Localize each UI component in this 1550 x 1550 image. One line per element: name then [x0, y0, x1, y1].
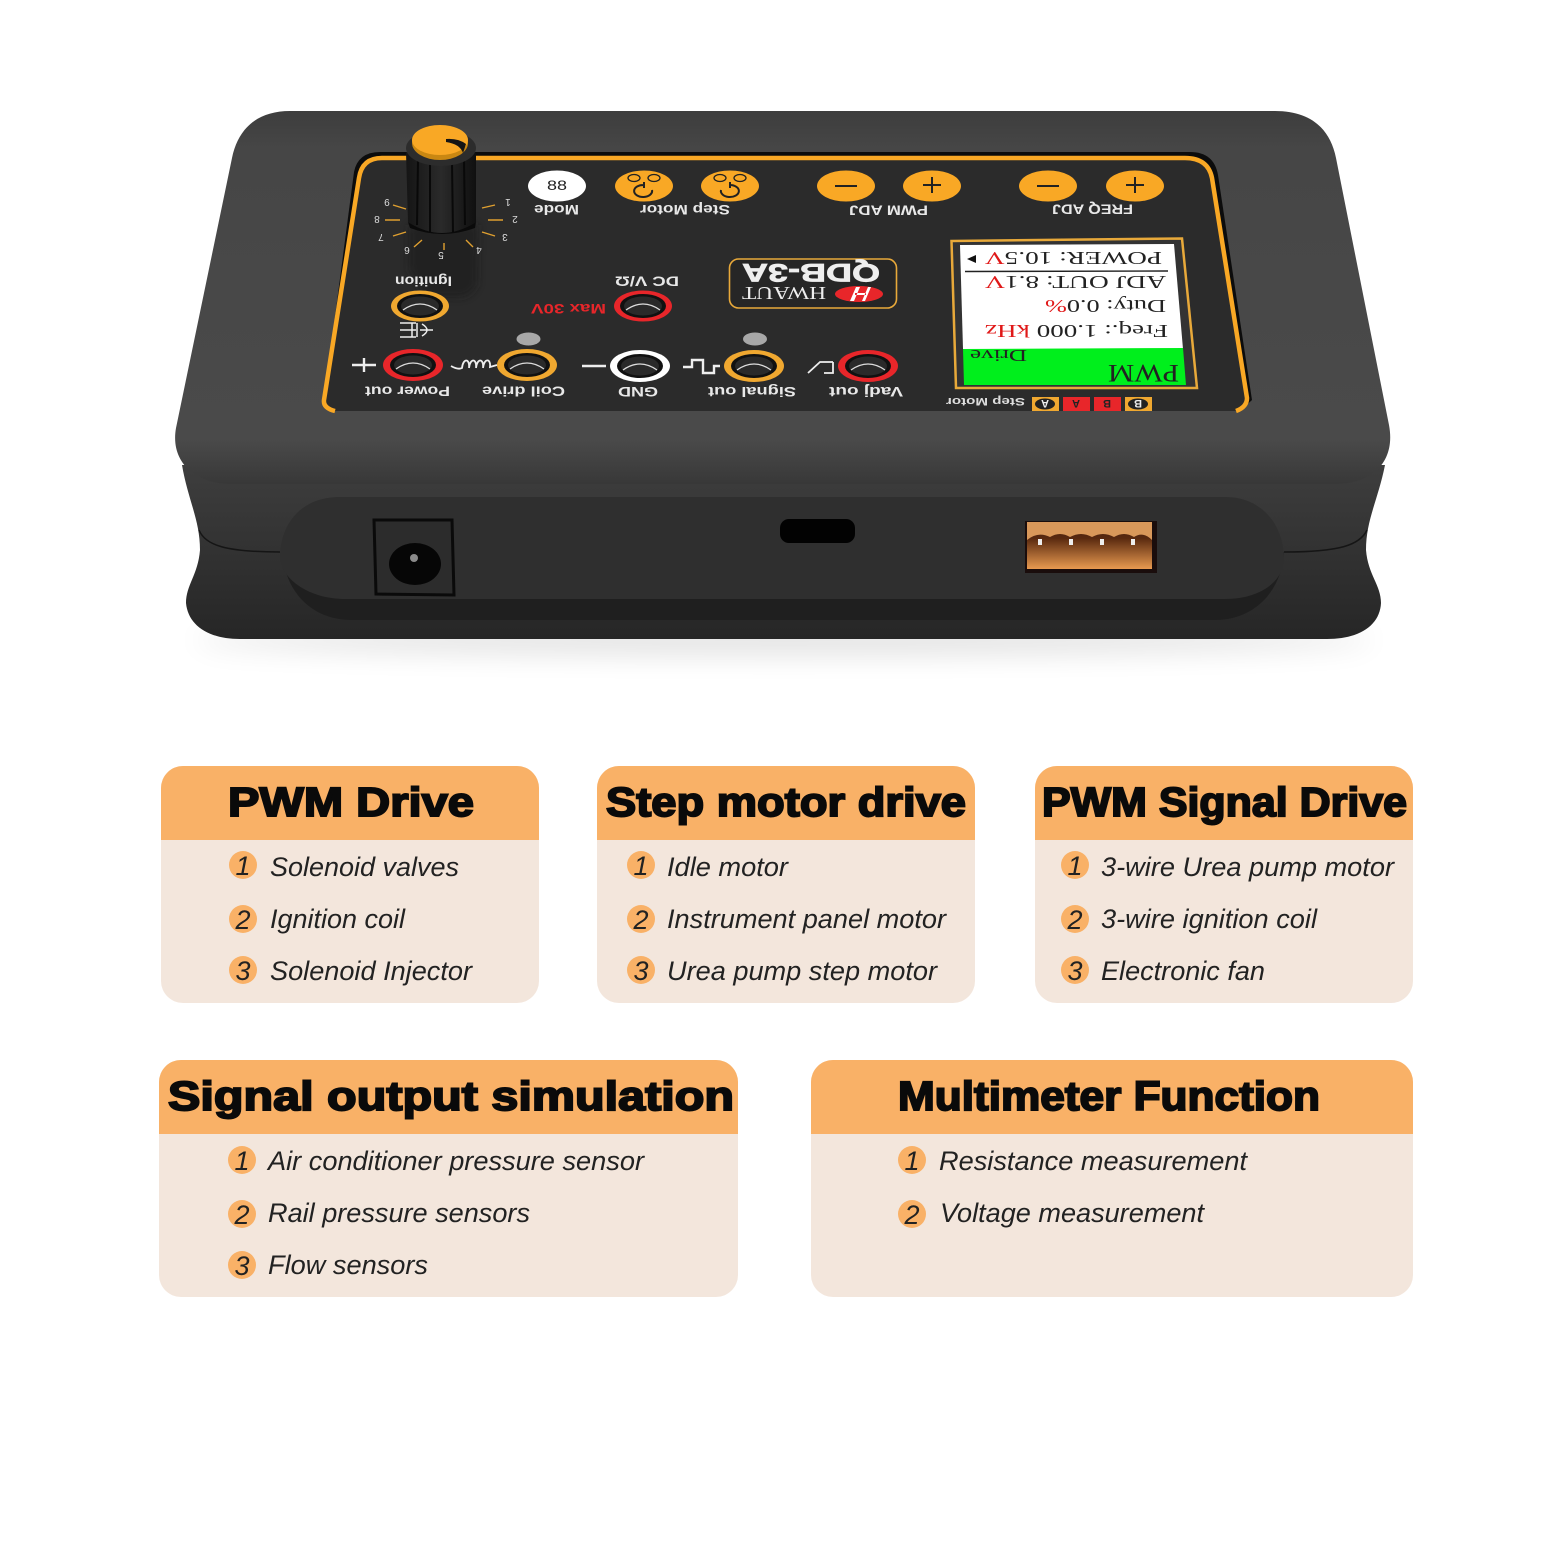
step motor pin legend: A	[1072, 397, 1080, 409]
dial tick marks	[385, 205, 503, 250]
button: mode	[528, 170, 586, 202]
step motor pin legend: Step Motor	[945, 395, 1025, 407]
jack: Vadj out	[838, 350, 898, 382]
dial numbers: 7	[378, 231, 384, 242]
panel: PWM Signal Drive	[1035, 766, 1413, 1003]
icon: DC power jack	[374, 520, 454, 595]
button: PWM plus	[903, 170, 961, 202]
panel fill	[324, 158, 1247, 411]
panel: Signal output simulation: Rail pressure sensors	[268, 1198, 530, 1228]
screen: PWM display: ADJ OUT: 8.1V	[985, 272, 1166, 292]
jack: ignition	[391, 290, 449, 322]
screen: PWM display: PWM	[1108, 359, 1179, 386]
jack labels: GND	[618, 384, 658, 400]
jack labels: Signal out	[708, 384, 796, 400]
button labels: PWM ADJ	[849, 202, 928, 218]
dial numbers: 3	[502, 231, 508, 242]
panel: Signal output simulation: 2	[233, 1200, 250, 1230]
icon: rear slot	[780, 519, 855, 543]
jack labels: Coil drive	[482, 384, 565, 400]
panel: Signal output simulation: Flow sensors	[268, 1250, 428, 1280]
step motor pin legend	[945, 395, 1152, 411]
panel: Multimeter Function: 1	[904, 1146, 920, 1176]
step motor pin legend: A	[1041, 397, 1049, 409]
product: QDB-3A device	[175, 111, 1390, 654]
step motor pin legend: B	[1103, 397, 1111, 409]
seam line	[199, 530, 1367, 552]
dial numbers: 2	[512, 213, 518, 224]
dial numbers	[374, 196, 518, 260]
panel: PWM Drive: 3	[235, 956, 251, 986]
panel: PWM Signal Drive: 3-wire ignition coil	[1101, 904, 1318, 934]
panel: PWM Drive: 2	[234, 905, 251, 935]
jack: power out	[383, 349, 443, 381]
device ground shadow	[194, 626, 1374, 654]
button labels	[534, 202, 1133, 218]
screen: PWM display: POWER: 10.5V	[985, 248, 1162, 268]
device top surface	[175, 111, 1390, 484]
panel: PWM Drive: PWM Drive	[228, 779, 474, 825]
icon: four-pin connector	[1025, 521, 1157, 573]
dial numbers: 5	[438, 249, 444, 260]
panel: PWM Drive: Solenoid valves	[270, 852, 459, 882]
screen: PWM display	[952, 238, 1197, 388]
button labels: Mode	[534, 202, 579, 218]
button: FREQ minus	[1019, 170, 1077, 202]
logo: QDB-3A HWAUT: HWAUT	[742, 283, 826, 303]
button: step motor forward	[701, 170, 759, 202]
panel: PWM Signal Drive: 3-wire Urea pump motor	[1101, 852, 1395, 882]
button: step motor reverse	[615, 170, 673, 202]
panel: Multimeter Function: Resistance measurement	[939, 1146, 1249, 1176]
panel: PWM Drive: 1	[235, 851, 251, 881]
button: PWM minus	[817, 170, 875, 202]
jack labels: Power out	[365, 384, 450, 400]
jack labels: Vadj out	[829, 384, 903, 400]
jack: DC volts/ohms	[614, 290, 672, 322]
jack: signal out	[724, 350, 784, 382]
panel: PWM Signal Drive: PWM Signal Drive	[1042, 779, 1407, 825]
logo: QDB-3A HWAUT: QDB-3A	[742, 258, 880, 286]
panel: Signal output simulation: 3	[234, 1251, 250, 1281]
jack labels: Max 30V	[530, 301, 606, 317]
panel: PWM Drive: Ignition coil	[270, 904, 406, 934]
jack labels: Ignition	[395, 274, 452, 290]
panel: Step motor drive: 2	[632, 905, 649, 935]
dial numbers: 8	[374, 213, 380, 224]
jack labels	[365, 274, 903, 400]
panel: Step motor drive: Instrument panel motor	[667, 904, 947, 934]
panel: Step motor drive: Idle motor	[667, 852, 789, 882]
panel: PWM Signal Drive: 1	[1067, 851, 1083, 881]
knob	[406, 125, 476, 234]
control panel	[324, 125, 1252, 411]
panel: PWM Drive	[161, 766, 539, 1003]
panel: Multimeter Function	[811, 1060, 1413, 1297]
step motor pin legend: B	[1134, 397, 1142, 409]
indicator LEDs	[516, 332, 767, 346]
logo: QDB-3A HWAUT	[730, 258, 896, 308]
jack: GND	[610, 350, 670, 382]
panel: Step motor drive: Urea pump step motor	[667, 956, 938, 986]
rear recess	[280, 497, 1284, 599]
panel: Multimeter Function: Voltage measurement	[940, 1198, 1205, 1228]
panel: PWM Signal Drive: 3	[1067, 956, 1083, 986]
dial numbers: 4	[476, 244, 482, 255]
panel: Multimeter Function: Multimeter Function	[898, 1073, 1320, 1119]
panel orange border	[324, 158, 1247, 411]
panel: Signal output simulation: Air conditioner pressure sensor	[266, 1146, 645, 1176]
panel: Step motor drive: 1	[633, 851, 649, 881]
button: FREQ plus	[1106, 170, 1164, 202]
panel: Signal output simulation: Signal output simulation	[168, 1073, 734, 1119]
button labels: Step Motor	[639, 202, 730, 218]
panel shadow edge	[324, 152, 1252, 411]
screen: PWM display: Drive	[970, 346, 1027, 365]
rear recess lower band	[282, 552, 1284, 620]
dial numbers: 9	[384, 196, 390, 207]
panel: Step motor drive: 3	[633, 956, 649, 986]
panel: Signal output simulation	[159, 1060, 738, 1297]
panel: Signal output simulation: 1	[234, 1146, 250, 1176]
panel: Multimeter Function: 2	[903, 1200, 920, 1230]
button labels: FREQ ADJ	[1052, 202, 1133, 218]
screen: PWM display: Freq.: 1.000 kHz	[985, 321, 1168, 341]
knob shadow	[409, 225, 478, 297]
button: mode: 88	[547, 177, 567, 193]
panel: PWM Signal Drive: 2	[1066, 905, 1083, 935]
dial numbers: 1	[505, 196, 511, 207]
device lower body	[182, 465, 1385, 639]
panel: PWM Signal Drive: Electronic fan	[1101, 956, 1265, 986]
panel: PWM Drive: Solenoid Injector	[270, 956, 473, 986]
panel: Step motor drive	[597, 766, 975, 1003]
screen: PWM display: Duty: 0.0%	[1045, 296, 1166, 316]
jack labels: DC V/Ω	[615, 274, 679, 290]
panel: Step motor drive: Step motor drive	[606, 779, 966, 825]
jack: coil drive	[497, 349, 557, 381]
dial numbers: 6	[404, 244, 410, 255]
icons: plus, coil, minus, pulse, arrow, ignition	[352, 323, 833, 373]
